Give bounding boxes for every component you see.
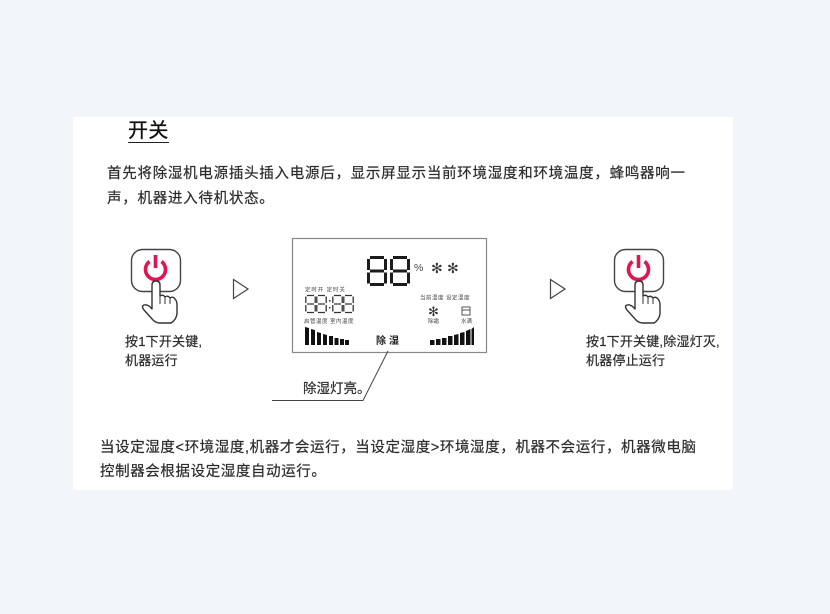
arrow: first <box>234 280 248 298</box>
humidity labels left: 启管温度 室内温度 <box>304 317 354 325</box>
humidity labels right: 当前湿度 设定湿度 <box>420 294 470 302</box>
icon: left power button with hand <box>132 250 180 323</box>
text block: intro: 声，机器进入待机状态。 <box>107 191 275 207</box>
text: right button caption <box>586 334 720 368</box>
small clock digits 88:88 <box>306 296 353 312</box>
dehumidify label: 除湿 <box>376 334 402 347</box>
timer labels: 定时开 定时关 <box>305 286 346 294</box>
text block: note: 控制器会根据设定湿度自动运行。 <box>100 464 326 480</box>
water full label: 水满 <box>461 317 473 325</box>
dehumidify snow icon: ✻ <box>428 304 439 319</box>
text: left button caption: 按1下开关键, <box>125 334 202 349</box>
title: 开关 <box>128 120 169 142</box>
text: right button caption: 机器停止运行 <box>586 353 665 368</box>
callout line <box>272 351 388 400</box>
left signal bars <box>305 327 349 345</box>
panel: white card <box>73 117 733 490</box>
percent symbol: % <box>414 262 423 274</box>
big digits 88 <box>368 258 408 284</box>
text: left button caption <box>125 334 202 368</box>
arrow: second <box>550 280 565 298</box>
fan symbols <box>431 260 459 276</box>
clock colon <box>329 300 330 308</box>
right signal bars <box>430 327 474 345</box>
text: left button caption: 机器运行 <box>125 353 178 368</box>
text: right button caption: 按1下开关键,除湿灯灭, <box>586 334 720 349</box>
icon: right power button with hand <box>614 250 664 323</box>
text: callout label: 除湿灯亮。 <box>303 381 370 396</box>
defrost label: 除霜 <box>428 317 440 325</box>
text block: intro: 首先将除湿机电源插头插入电源后，显示屏显示当前环境湿度和环境温度，蜂鸣器响一 <box>107 166 686 182</box>
text block: note: 当设定湿度<环境湿度,机器才会运行，当设定湿度>环境湿度，机器不会运行，机器微电脑 <box>100 440 697 456</box>
text block: intro <box>107 165 686 207</box>
fan symbols: ✻ <box>431 260 443 276</box>
fan symbols: ✻ <box>447 260 459 276</box>
text block: note <box>100 439 697 480</box>
LCD display panel <box>292 238 486 352</box>
water tank icon <box>462 307 470 315</box>
